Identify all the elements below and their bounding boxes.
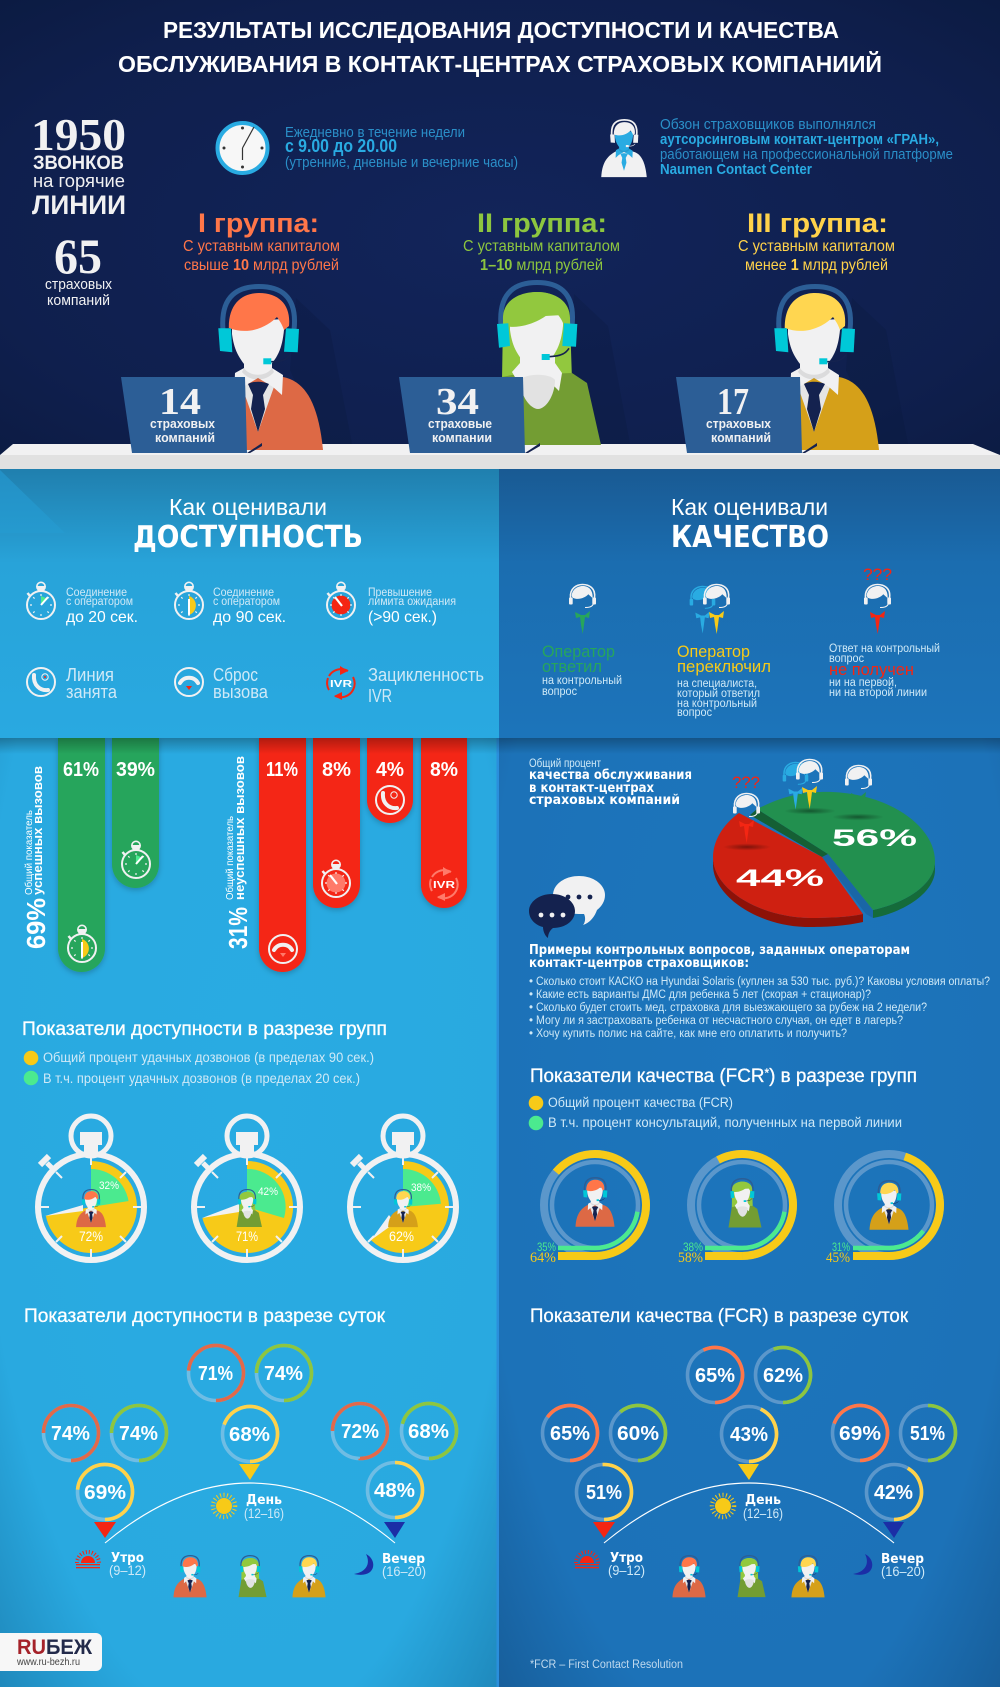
label: up to 20 sec: Соединение bbox=[66, 587, 127, 599]
ring values: quality: 51% bbox=[910, 1423, 945, 1445]
label: day: (12–16) bbox=[244, 1505, 284, 1521]
stat: calls and companies: 65 bbox=[54, 228, 102, 284]
bar icon: stopwatch green bbox=[122, 841, 150, 878]
label: over limit: лимита ожидания bbox=[368, 596, 456, 608]
label: operator answered: Оператор bbox=[542, 642, 615, 661]
logo bbox=[0, 1633, 102, 1671]
stopwatch chart: group I: 32% bbox=[99, 1180, 119, 1192]
agent: group II bbox=[491, 282, 601, 445]
ring values: availability: 72% bbox=[341, 1421, 379, 1443]
heading: quality bbox=[671, 494, 829, 555]
ring values: availability: 71% bbox=[198, 1363, 233, 1385]
heading: availability by time of day: Показатели доступности в разрезе суток bbox=[24, 1306, 386, 1327]
ring values: availability: 69% bbox=[84, 1482, 126, 1504]
label: no answer: не получен bbox=[829, 660, 914, 679]
label: operator transferred: на специалиста, bbox=[677, 678, 757, 690]
icon: sunrise bbox=[76, 1552, 100, 1568]
legend: quality: В т.ч. процент консультаций, полученных на первой линии bbox=[548, 1115, 902, 1130]
group III heading bbox=[738, 208, 895, 274]
stopwatch chart: group II: 71% bbox=[236, 1229, 258, 1244]
agents row: quality bbox=[672, 1556, 825, 1597]
bar labels bbox=[63, 759, 458, 781]
label: no answer: вопрос bbox=[829, 653, 864, 665]
group II heading: II группа: bbox=[477, 208, 607, 238]
legend: availability: В т.ч. процент удачных дозвонов (в пределах 20 сек.) bbox=[43, 1071, 360, 1086]
icon: no answer: ??? bbox=[863, 565, 892, 584]
icon: IVR loop bbox=[327, 666, 355, 700]
sample questions: Какие есть варианты ДМС для ребенка 5 лет (скорая + стационар)? bbox=[536, 989, 871, 1001]
value: 44%: 44% bbox=[736, 865, 824, 892]
ring values: availability: 74% bbox=[51, 1423, 90, 1445]
schedule text: (утренние, дневные и вечерние часы) bbox=[285, 154, 518, 171]
stat: calls and companies: ЗВОНКОВ bbox=[33, 153, 124, 174]
group I heading: С уставным капиталом bbox=[183, 238, 340, 255]
ring chart: quality group II: 58% bbox=[678, 1250, 703, 1266]
contact centre text: Naumen Contact Center bbox=[660, 161, 812, 178]
label: line busy: Линия bbox=[66, 665, 114, 685]
sample questions: • bbox=[529, 976, 533, 988]
desk bbox=[0, 444, 1000, 469]
agent shadows bbox=[290, 294, 908, 444]
heading: availability bbox=[133, 494, 363, 555]
stopwatch chart: group III bbox=[350, 1116, 456, 1260]
rings: quality by time of day bbox=[532, 1338, 956, 1530]
label: no answer bbox=[829, 643, 940, 699]
pie agent: answered bbox=[845, 766, 872, 815]
icon: stopwatch 20 sec bbox=[27, 582, 55, 619]
agents row: availability bbox=[173, 1556, 326, 1597]
icon: operator transferred bbox=[690, 584, 730, 634]
label: line busy: занята bbox=[66, 682, 118, 702]
ring chart: quality group I: 64% bbox=[530, 1250, 556, 1266]
label: evening quality: Вечер bbox=[881, 1552, 924, 1567]
logo: RUБЕЖ bbox=[17, 1636, 93, 1659]
group III heading: менее 1 млрд рублей bbox=[745, 257, 888, 274]
ring values: quality bbox=[550, 1365, 945, 1504]
laptop: group II: страховые bbox=[428, 416, 492, 431]
icon: sun quality bbox=[712, 1495, 734, 1517]
bar labels: 8% bbox=[430, 759, 458, 781]
title: РЕЗУЛЬТАТЫ ИССЛЕДОВАНИЯ ДОСТУПНОСТИ И КАЧЕСТВА bbox=[163, 17, 839, 43]
label: evening: Вечер bbox=[382, 1552, 425, 1567]
stopwatch chart: group I bbox=[38, 1116, 144, 1260]
ring chart: quality group III: 31% bbox=[832, 1240, 850, 1254]
label: up to 20 sec: с оператором bbox=[66, 596, 133, 608]
heading: quality by group: ) в разрезе групп bbox=[769, 1066, 917, 1087]
legend: availability bbox=[24, 1050, 374, 1086]
stat: calls and companies: ЛИНИИ bbox=[32, 190, 126, 220]
icon: moon quality bbox=[853, 1554, 872, 1575]
icon: no answer bbox=[863, 565, 892, 634]
ring chart: quality group II: 38% bbox=[683, 1240, 703, 1254]
ring values: quality: 51% bbox=[586, 1482, 622, 1504]
label: no answer: Ответ на контрольный bbox=[829, 643, 940, 655]
vertical label: successful calls: Общий показатель bbox=[23, 810, 35, 895]
label: IVR loop: IVR bbox=[368, 686, 392, 706]
group II heading: 1–10 млрд рублей bbox=[480, 257, 603, 274]
icon: IVR loop: IVR bbox=[330, 678, 353, 690]
label: morning quality: (9–12) bbox=[608, 1562, 645, 1578]
sample questions: Хочу купить полис на сайте, как мне его оплатить и получить? bbox=[536, 1028, 847, 1040]
panel: availability column background bbox=[0, 469, 499, 1687]
ring chart: quality group I bbox=[523, 1133, 667, 1277]
bar icon: IVR bbox=[430, 867, 458, 901]
sample questions: Могу ли я застраховать ребенка от несчастного случая, он едет в лагерь? bbox=[536, 1015, 903, 1027]
label: call dropped: Сброс bbox=[213, 665, 258, 685]
label: evening: (16–20) bbox=[382, 1563, 426, 1579]
heading: quality: Как оценивали bbox=[671, 494, 828, 520]
ring values: quality: 62% bbox=[763, 1365, 803, 1387]
laptop: group III: страховых bbox=[706, 416, 772, 431]
contact centre text bbox=[660, 116, 953, 178]
ring values: availability: 68% bbox=[408, 1421, 449, 1443]
stopwatch chart: group II bbox=[194, 1116, 300, 1260]
label: evening quality: (16–20) bbox=[881, 1563, 925, 1579]
ring values: quality: 42% bbox=[874, 1482, 913, 1504]
label: morning: Утро bbox=[111, 1551, 144, 1566]
pie agent: no answer: ??? bbox=[732, 773, 760, 792]
ring values: quality: 69% bbox=[839, 1423, 881, 1445]
vertical label: failed calls bbox=[223, 756, 253, 949]
vertical label: failed calls: 31% bbox=[223, 907, 253, 949]
group I heading: свыше 10 млрд рублей bbox=[184, 257, 339, 274]
label: up to 90 sec: Соединение bbox=[213, 587, 274, 599]
pie agent: transferred bbox=[783, 760, 823, 810]
sample questions bbox=[529, 943, 990, 1040]
label: call dropped: вызова bbox=[213, 682, 269, 702]
pie heading bbox=[529, 758, 692, 808]
group I heading: I группа: bbox=[198, 208, 319, 238]
laptop: group II bbox=[399, 377, 540, 453]
pie heading: в контакт-центрах bbox=[529, 781, 655, 796]
laptop: group III: 17 bbox=[717, 381, 749, 423]
icon: call dropped bbox=[175, 668, 203, 696]
label: morning quality: Утро bbox=[610, 1551, 643, 1566]
legend: availability: Общий процент удачных дозвонов (в пределах 90 сек.) bbox=[43, 1050, 374, 1065]
footnote: *FCR – First Contact Resolution bbox=[530, 1659, 683, 1671]
icon: line busy bbox=[27, 668, 55, 696]
label: evening bbox=[382, 1552, 426, 1579]
label: evening quality bbox=[881, 1552, 925, 1579]
label: morning: (9–12) bbox=[109, 1562, 146, 1578]
schedule text bbox=[285, 124, 518, 171]
ring chart: quality group I: 35% bbox=[537, 1240, 556, 1254]
bar labels: 39% bbox=[116, 759, 155, 781]
stopwatch chart: group I: 72% bbox=[79, 1229, 103, 1244]
label: operator answered bbox=[542, 642, 622, 698]
legend: quality: Общий процент качества (FCR) bbox=[548, 1095, 733, 1110]
icon: moon bbox=[354, 1554, 373, 1575]
label: IVR loop bbox=[368, 665, 484, 706]
label: IVR loop: Зацикленность bbox=[368, 665, 484, 685]
heading: availability: ДОСТУПНОСТЬ bbox=[133, 520, 363, 555]
label: day quality: День bbox=[745, 1493, 781, 1508]
bar labels: 4% bbox=[376, 759, 404, 781]
bar labels: 61% bbox=[63, 759, 99, 781]
agent: group I bbox=[193, 286, 323, 450]
label: operator transferred bbox=[677, 642, 771, 719]
group III heading: III группа: bbox=[747, 208, 888, 238]
ring values: availability bbox=[51, 1363, 449, 1504]
panel: quality column background bbox=[499, 469, 1000, 1687]
label: day bbox=[244, 1493, 284, 1521]
stat: calls and companies: 1950 bbox=[31, 109, 126, 160]
label: operator transferred: на контрольный bbox=[677, 698, 757, 710]
vertical label: successful calls bbox=[21, 766, 51, 949]
label: up to 20 sec: до 20 сек. bbox=[66, 609, 138, 626]
label: day quality bbox=[743, 1493, 783, 1521]
agent: group III bbox=[749, 286, 879, 450]
panel: quality header bbox=[499, 469, 1000, 738]
ring chart: quality group III: 45% bbox=[826, 1250, 850, 1266]
label: day: День bbox=[246, 1493, 282, 1508]
contact centre text: аутсорсинговым контакт-центром «ГРАН», bbox=[660, 131, 939, 148]
label: operator answered: на контрольный bbox=[542, 675, 622, 687]
icon: clock bbox=[218, 123, 268, 173]
heading: quality by time of day: Показатели качества (FCR) в разрезе суток bbox=[530, 1306, 909, 1327]
schedule text: Ежедневно в течение недели bbox=[285, 124, 465, 141]
pie heading: Общий процент bbox=[529, 758, 602, 770]
sample questions: Примеры контрольных вопросов, заданных операторам bbox=[529, 943, 910, 958]
label: line busy bbox=[66, 665, 118, 702]
laptop: group I: 14 bbox=[159, 381, 201, 423]
label: no answer: ни на первой, bbox=[829, 677, 897, 689]
heading: availability by group: Показатели доступности в разрезе групп bbox=[22, 1019, 387, 1040]
label: operator transferred: Оператор bbox=[677, 642, 750, 661]
label: operator transferred: вопрос bbox=[677, 707, 712, 719]
label: morning bbox=[109, 1551, 146, 1578]
sample questions: контакт-центров страховщиков: bbox=[529, 956, 749, 971]
stopwatch chart: group III: 62% bbox=[389, 1229, 414, 1244]
day arc with markers: quality bbox=[593, 1464, 904, 1543]
label: up to 90 sec: с оператором bbox=[213, 596, 280, 608]
icon: sunrise quality bbox=[575, 1552, 599, 1568]
ring values: availability: 74% bbox=[264, 1363, 303, 1385]
logo: www.ru-bezh.ru bbox=[16, 1657, 80, 1668]
heading: availability: Как оценивали bbox=[169, 494, 327, 520]
icon: sun bbox=[213, 1495, 235, 1517]
legend: quality bbox=[529, 1095, 902, 1130]
stopwatch chart: group II: 42% bbox=[258, 1186, 278, 1198]
pie agent: no answer bbox=[732, 773, 760, 843]
icon: white operator bbox=[601, 120, 647, 177]
heading: quality by group: Показатели качества (FCR bbox=[530, 1066, 766, 1087]
label: day quality: (12–16) bbox=[743, 1505, 783, 1521]
contact centre text: работающем на профессиональной платформе bbox=[660, 146, 953, 163]
vertical label: failed calls: неуспешных вызовов bbox=[232, 756, 247, 900]
stat: calls and companies: страховых bbox=[45, 276, 112, 293]
group I heading bbox=[183, 208, 340, 274]
sample questions: • bbox=[529, 1015, 533, 1027]
schedule text: с 9.00 до 20.00 bbox=[285, 136, 397, 156]
ring values: quality: 43% bbox=[730, 1424, 768, 1446]
ring values: quality: 60% bbox=[617, 1423, 659, 1445]
laptop: group I: страховых bbox=[150, 416, 216, 431]
panel: availability header bbox=[0, 469, 499, 738]
icon: stopwatch 90 sec bbox=[175, 582, 203, 619]
vertical label: successful calls: успешных вызовов bbox=[30, 766, 45, 895]
bar icon: stopwatch red bbox=[322, 860, 350, 897]
icon: operator answered bbox=[569, 584, 596, 634]
pie heading: качества обслуживания bbox=[529, 768, 692, 783]
rings: availability by time of day bbox=[44, 1343, 463, 1522]
day arc with markers: availability bbox=[94, 1464, 405, 1543]
label: no answer: ни на второй линии bbox=[829, 687, 927, 699]
ring values: availability: 48% bbox=[374, 1480, 415, 1502]
laptop: group III: компаний bbox=[711, 430, 771, 445]
laptop: group II: 34 bbox=[436, 381, 479, 423]
stat: calls and companies bbox=[31, 109, 126, 309]
label: over limit bbox=[368, 587, 456, 626]
stopwatch chart: group III: 38% bbox=[411, 1182, 431, 1194]
ring values: availability: 74% bbox=[119, 1423, 158, 1445]
background: header bbox=[0, 0, 1000, 470]
bar labels: 8% bbox=[322, 759, 351, 781]
ring chart: quality group II bbox=[673, 1136, 811, 1274]
label: up to 90 sec: до 90 сек. bbox=[213, 609, 286, 626]
laptop: group I bbox=[121, 377, 262, 453]
sample questions: • bbox=[529, 989, 533, 1001]
label: over limit: (>90 сек.) bbox=[368, 609, 437, 626]
sample questions: • bbox=[529, 1028, 533, 1040]
label: up to 20 sec bbox=[66, 587, 138, 626]
title bbox=[118, 17, 882, 77]
label: morning quality bbox=[608, 1551, 645, 1578]
sample questions: • bbox=[529, 1002, 533, 1014]
contact centre text: Обзон страховщиков выполнялся bbox=[660, 116, 876, 133]
label: operator answered: ответил bbox=[542, 657, 602, 676]
chart: 3D pie quality bbox=[713, 792, 935, 927]
heading: quality: КАЧЕСТВО bbox=[671, 520, 829, 555]
label: operator transferred: который ответил bbox=[677, 688, 760, 700]
laptop: group II: компании bbox=[432, 430, 492, 445]
group III heading: С уставным капиталом bbox=[738, 238, 895, 255]
bar icon: stopwatch yellow bbox=[68, 925, 96, 962]
bar labels: 11% bbox=[266, 759, 298, 781]
stat: calls and companies: компаний bbox=[47, 292, 110, 309]
label: call dropped bbox=[213, 665, 269, 702]
bar icon: IVR: IVR bbox=[433, 879, 456, 891]
sample questions: Сколько будет стоить мед. страховка для выезжающего за рубеж на 2 недели? bbox=[536, 1002, 927, 1014]
ring values: quality: 65% bbox=[550, 1423, 590, 1445]
vertical label: successful calls: 69% bbox=[21, 898, 51, 949]
label: up to 90 sec bbox=[213, 587, 286, 626]
stat: calls and companies: на горячие bbox=[33, 171, 125, 191]
value: 56%: 56% bbox=[832, 825, 917, 852]
bar icon: phone bbox=[376, 786, 404, 814]
label: operator transferred: переключил bbox=[677, 657, 771, 676]
title: ОБСЛУЖИВАНИЯ В КОНТАКТ-ЦЕНТРАХ СТРАХОВЫХ КОМПАНИИЙ bbox=[118, 50, 882, 77]
label: operator answered: вопрос bbox=[542, 686, 577, 698]
icon: stopwatch over limit bbox=[327, 582, 355, 619]
ring values: availability: 68% bbox=[229, 1424, 270, 1446]
label: over limit: Превышение bbox=[368, 587, 432, 599]
laptop: group I: компаний bbox=[155, 430, 215, 445]
ring values: quality: 65% bbox=[695, 1365, 735, 1387]
group II heading bbox=[463, 208, 620, 274]
vertical label: failed calls: Общий показатель bbox=[224, 816, 236, 900]
group II heading: С уставным капиталом bbox=[463, 238, 620, 255]
heading: quality by group: * bbox=[764, 1066, 769, 1080]
laptop: group III bbox=[676, 377, 817, 453]
chart: availability bars bbox=[58, 738, 467, 972]
icon: speech bubbles bbox=[529, 876, 605, 938]
pie heading: страховых компаний bbox=[529, 793, 680, 808]
bar icon: dropped call bbox=[269, 935, 297, 963]
ring chart: quality group III bbox=[825, 1141, 953, 1269]
